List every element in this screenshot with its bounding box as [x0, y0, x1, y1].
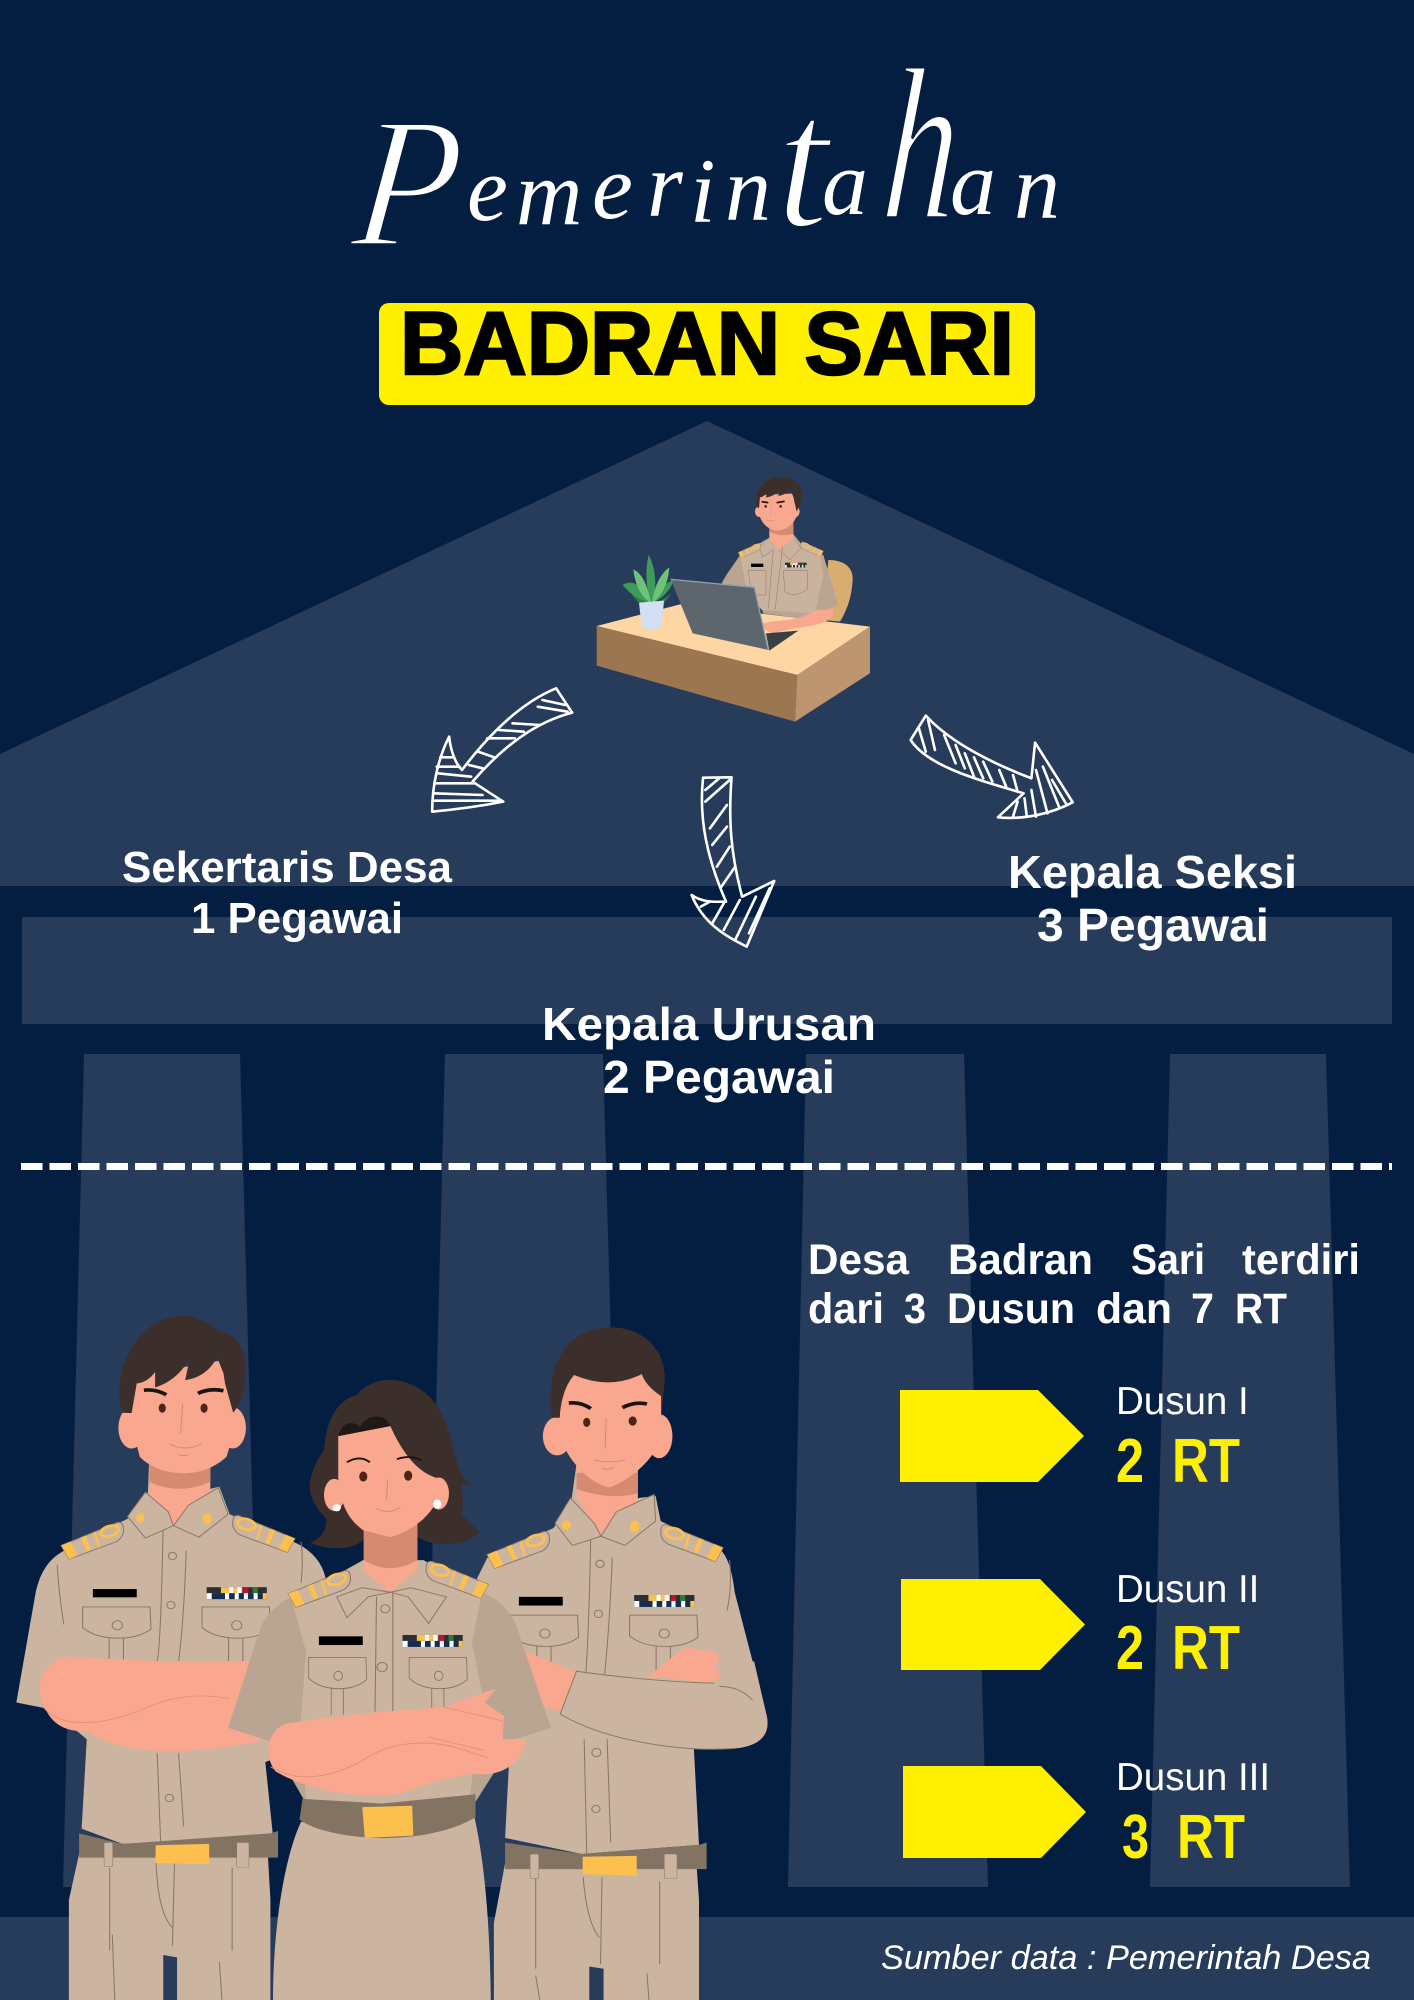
face [324, 1479, 344, 1511]
neck [364, 1523, 417, 1592]
illustration: officer at desk [597, 477, 870, 722]
title: e [467, 138, 508, 240]
row: Dusun III: 3 [1122, 1803, 1149, 1872]
text: dusun summary: Desa [808, 1236, 910, 1284]
text: dusun summary [808, 1236, 1360, 1333]
roof pediment [0, 421, 1414, 886]
text: dusun summary: RT [1235, 1285, 1287, 1333]
text: dusun summary: 3 [904, 1285, 926, 1333]
crossed arms [40, 1657, 265, 1751]
row: Dusun II: 2 [1116, 1614, 1144, 1683]
label: Kepala Seksi: Kepala Seksi [1008, 846, 1297, 898]
officer right [477, 1327, 768, 2000]
skirt [273, 1817, 491, 2000]
title: P [345, 79, 472, 285]
label: Sekertaris Desa: Sekertaris Desa [122, 843, 453, 892]
row: Dusun III: RT [1177, 1803, 1245, 1872]
hair back [310, 1380, 480, 1548]
title badge: BADRAN SARI [400, 293, 1014, 393]
building backdrop [0, 421, 1414, 2000]
forearm and hand [526, 1651, 577, 1712]
potted plant [623, 555, 673, 629]
beam [22, 917, 1392, 1024]
label: Kepala Seksi [1008, 846, 1297, 951]
footer source: Sumber data : Pemerintah Desa [881, 1939, 1371, 1977]
officer left [16, 1316, 327, 2000]
row: Dusun I: RT [1172, 1427, 1240, 1496]
label: Kepala Seksi: 3 Pegawai [1037, 899, 1269, 951]
head [755, 477, 802, 549]
text: dusun summary: 7 [1191, 1285, 1214, 1333]
title: m [516, 142, 582, 244]
title: n [725, 138, 771, 240]
row: Dusun II [901, 1568, 1259, 1683]
text: dusun summary: terdiri [1242, 1236, 1360, 1284]
title [345, 25, 1060, 285]
head [543, 1417, 571, 1455]
row: Dusun I: Dusun I [1116, 1380, 1249, 1423]
label: Kepala Urusan: Kepala Urusan [542, 998, 876, 1050]
title: n [1014, 136, 1060, 238]
row: Dusun II: Dusun II [1116, 1568, 1259, 1611]
illustration: three officers [16, 1316, 768, 2000]
belt [79, 1831, 278, 1858]
column 1 [63, 1054, 263, 1887]
label: Sekertaris Desa: 1 Pegawai [191, 894, 403, 943]
arrow tag [901, 1579, 1085, 1670]
arrow tag [903, 1766, 1086, 1858]
arrow: to Sekertaris Desa [432, 688, 572, 812]
torso [722, 534, 838, 620]
text: dusun summary: dan [1096, 1285, 1172, 1333]
row: Dusun III [903, 1756, 1270, 1872]
label: Kepala Urusan [542, 998, 876, 1103]
belt [505, 1843, 707, 1869]
label: Sekertaris Desa [122, 843, 453, 943]
title: r [647, 134, 684, 236]
title: e [592, 136, 633, 238]
column 4 [1150, 1054, 1350, 1887]
text: dusun summary: Sari [1131, 1236, 1205, 1284]
column 3 [788, 1054, 988, 1887]
text: dusun summary: Dusun [947, 1285, 1075, 1333]
belt [299, 1794, 476, 1838]
arrow: to Kepala Seksi [911, 716, 1073, 818]
arm [763, 609, 833, 633]
title: a [822, 132, 868, 234]
label: Kepala Urusan: 2 Pegawai [603, 1051, 835, 1103]
row: Dusun I [900, 1380, 1249, 1496]
officer centre [228, 1380, 551, 2000]
title: a [950, 132, 996, 234]
title: i [690, 140, 716, 242]
desk [597, 604, 870, 722]
text: dusun summary: dari [808, 1285, 884, 1333]
divider [21, 1163, 1392, 1170]
crossed arms [269, 1689, 526, 1795]
column 2 [424, 1054, 626, 1887]
blouse [228, 1560, 551, 1803]
arrow: to Kepala Urusan [692, 777, 774, 947]
title: h [877, 25, 968, 266]
arrow tag [900, 1390, 1084, 1482]
title: t [776, 58, 833, 268]
row: Dusun II: RT [1172, 1614, 1240, 1683]
row: Dusun I: 2 [1116, 1427, 1144, 1496]
head [118, 1407, 145, 1449]
laptop [671, 579, 798, 651]
footer band [0, 1917, 1414, 2000]
text: dusun summary: Badran [948, 1236, 1093, 1284]
chair [823, 560, 853, 622]
sleeve [560, 1661, 768, 1749]
row: Dusun III: Dusun III [1116, 1756, 1270, 1799]
